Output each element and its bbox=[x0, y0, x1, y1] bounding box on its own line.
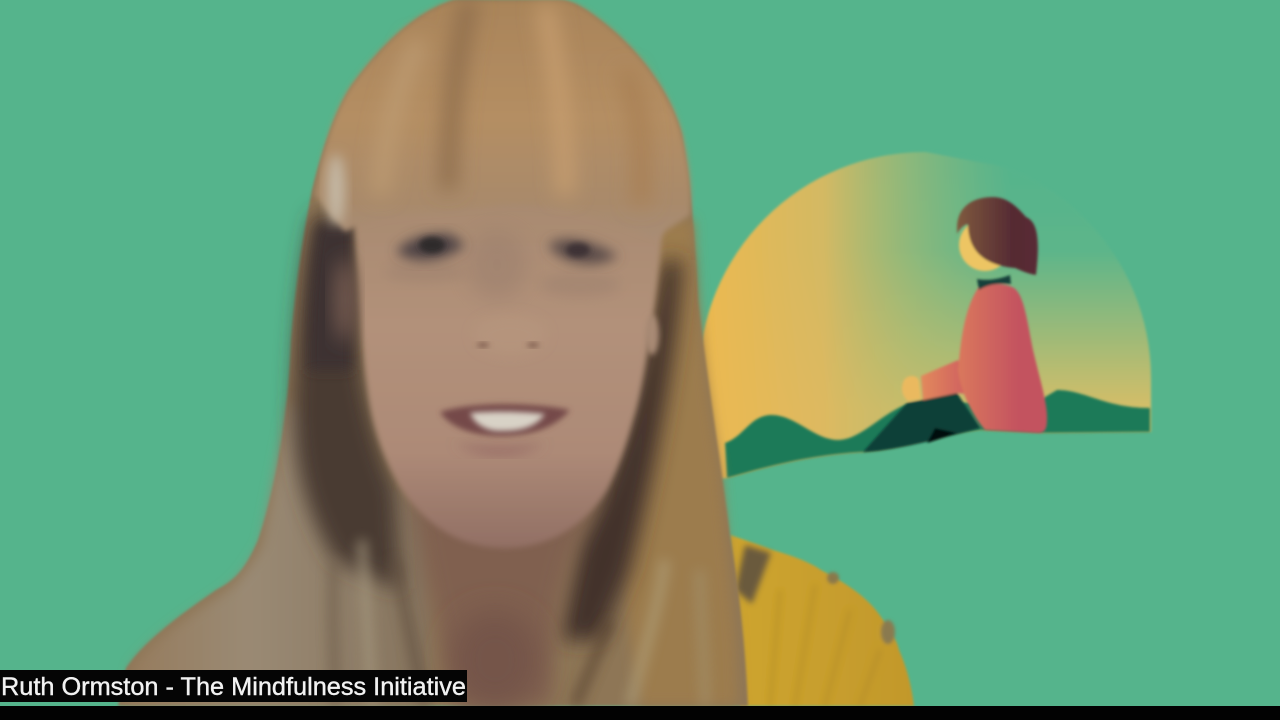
face bbox=[335, 190, 665, 548]
right ear bbox=[645, 315, 659, 355]
sun semicircle with gradient bbox=[699, 152, 1151, 480]
figure torso bbox=[958, 284, 1047, 433]
left eye bbox=[396, 234, 465, 260]
nose bbox=[474, 315, 546, 355]
name tag: Ruth Ormston - The Mindfulness Initiative bbox=[1, 673, 466, 701]
left iris bbox=[419, 237, 445, 253]
bottom black bar bbox=[0, 706, 1280, 720]
right eye bbox=[548, 239, 618, 264]
right side hair bbox=[620, 220, 738, 706]
hair highlight bbox=[327, 154, 345, 226]
figure legs bbox=[863, 393, 980, 452]
bangs strands bbox=[380, 0, 642, 205]
nostrils bbox=[477, 342, 539, 348]
illustration: meditating figure in sun bbox=[699, 152, 1151, 480]
bangs bbox=[315, 0, 691, 238]
figure hand bbox=[902, 376, 921, 401]
face shadows bbox=[467, 230, 527, 300]
left side dark hair bbox=[294, 210, 400, 590]
figure arm bbox=[921, 360, 975, 400]
left ear bbox=[335, 258, 355, 342]
green hills bbox=[725, 390, 1150, 478]
neck bbox=[410, 490, 600, 706]
mouth bbox=[440, 404, 570, 454]
figure face bbox=[959, 219, 1011, 271]
hair strands bbox=[333, 540, 705, 706]
right iris bbox=[566, 243, 590, 257]
hair silhouette and shoulders bbox=[118, 0, 748, 706]
lower left hair and shoulder bbox=[125, 400, 430, 706]
figure collar bbox=[977, 275, 1011, 290]
sweater bbox=[730, 535, 914, 706]
figure hair bbox=[957, 197, 1038, 275]
seated figure bbox=[863, 197, 1047, 452]
teeth bbox=[470, 412, 545, 431]
presenter bbox=[118, 0, 914, 710]
